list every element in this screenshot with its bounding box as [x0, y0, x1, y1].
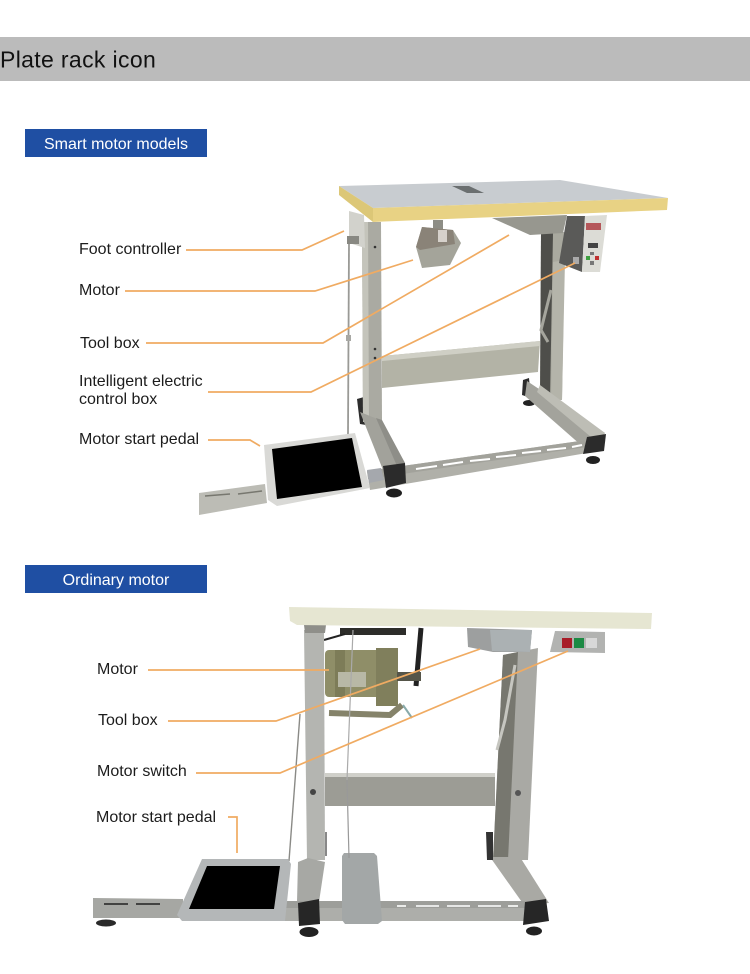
control box [559, 215, 607, 272]
callout: motor: Motor [79, 282, 121, 299]
callout: motor: Motor [97, 661, 139, 678]
header band [0, 37, 750, 81]
motor [416, 220, 461, 268]
front left cap and foot [383, 463, 406, 498]
motor switch [550, 631, 605, 653]
table top [289, 607, 652, 629]
callout: tool box [80, 235, 509, 352]
left leg [297, 625, 327, 902]
table illustration: ordinary motor [93, 607, 652, 937]
right foot [523, 899, 549, 936]
callout: foot controller: Foot controller [79, 241, 182, 258]
callout: motor start pedal: Motor start pedal [79, 431, 199, 448]
right leg [540, 232, 565, 400]
right leg [486, 648, 549, 905]
callout: foot controller [79, 231, 344, 258]
crossbar [382, 341, 540, 388]
callout: motor switch [97, 651, 568, 780]
left foot [298, 899, 320, 937]
crossbar [325, 773, 495, 806]
title: Plate rack icon [0, 46, 156, 72]
callout: intelligent electric control box: Intelligent electric [79, 373, 203, 390]
callout: intelligent electric control box: control box [79, 391, 157, 408]
long rail [199, 440, 587, 515]
badge: ordinary motor: Ordinary motor [63, 572, 170, 589]
badge: smart motor models: Smart motor models [44, 136, 188, 153]
pedal [177, 859, 291, 921]
callout: tool box: Tool box [80, 335, 140, 352]
wire [289, 714, 300, 861]
callout: motor [79, 260, 413, 299]
callout: tool box: Tool box [98, 712, 158, 729]
back right foot [522, 378, 605, 453]
callout: motor start pedal [96, 809, 237, 853]
tool box [467, 628, 532, 652]
table illustration: smart motor [199, 180, 668, 515]
center pedal [342, 630, 382, 924]
badge: ordinary motor [25, 565, 207, 593]
badge: smart motor models [25, 129, 207, 157]
left leg [357, 222, 405, 470]
callout: intelligent electric control box [79, 263, 575, 408]
front right cap and foot [583, 434, 606, 464]
foot controller [346, 211, 365, 434]
pedal [264, 433, 384, 506]
callout: motor start pedal [79, 431, 260, 448]
motor assembly [324, 628, 421, 718]
long rail [93, 898, 525, 926]
callout: motor start pedal: Motor start pedal [96, 809, 216, 826]
callout: tool box [98, 649, 480, 729]
table top [339, 180, 668, 222]
callout: motor switch: Motor switch [97, 763, 187, 780]
tool box [492, 215, 567, 235]
